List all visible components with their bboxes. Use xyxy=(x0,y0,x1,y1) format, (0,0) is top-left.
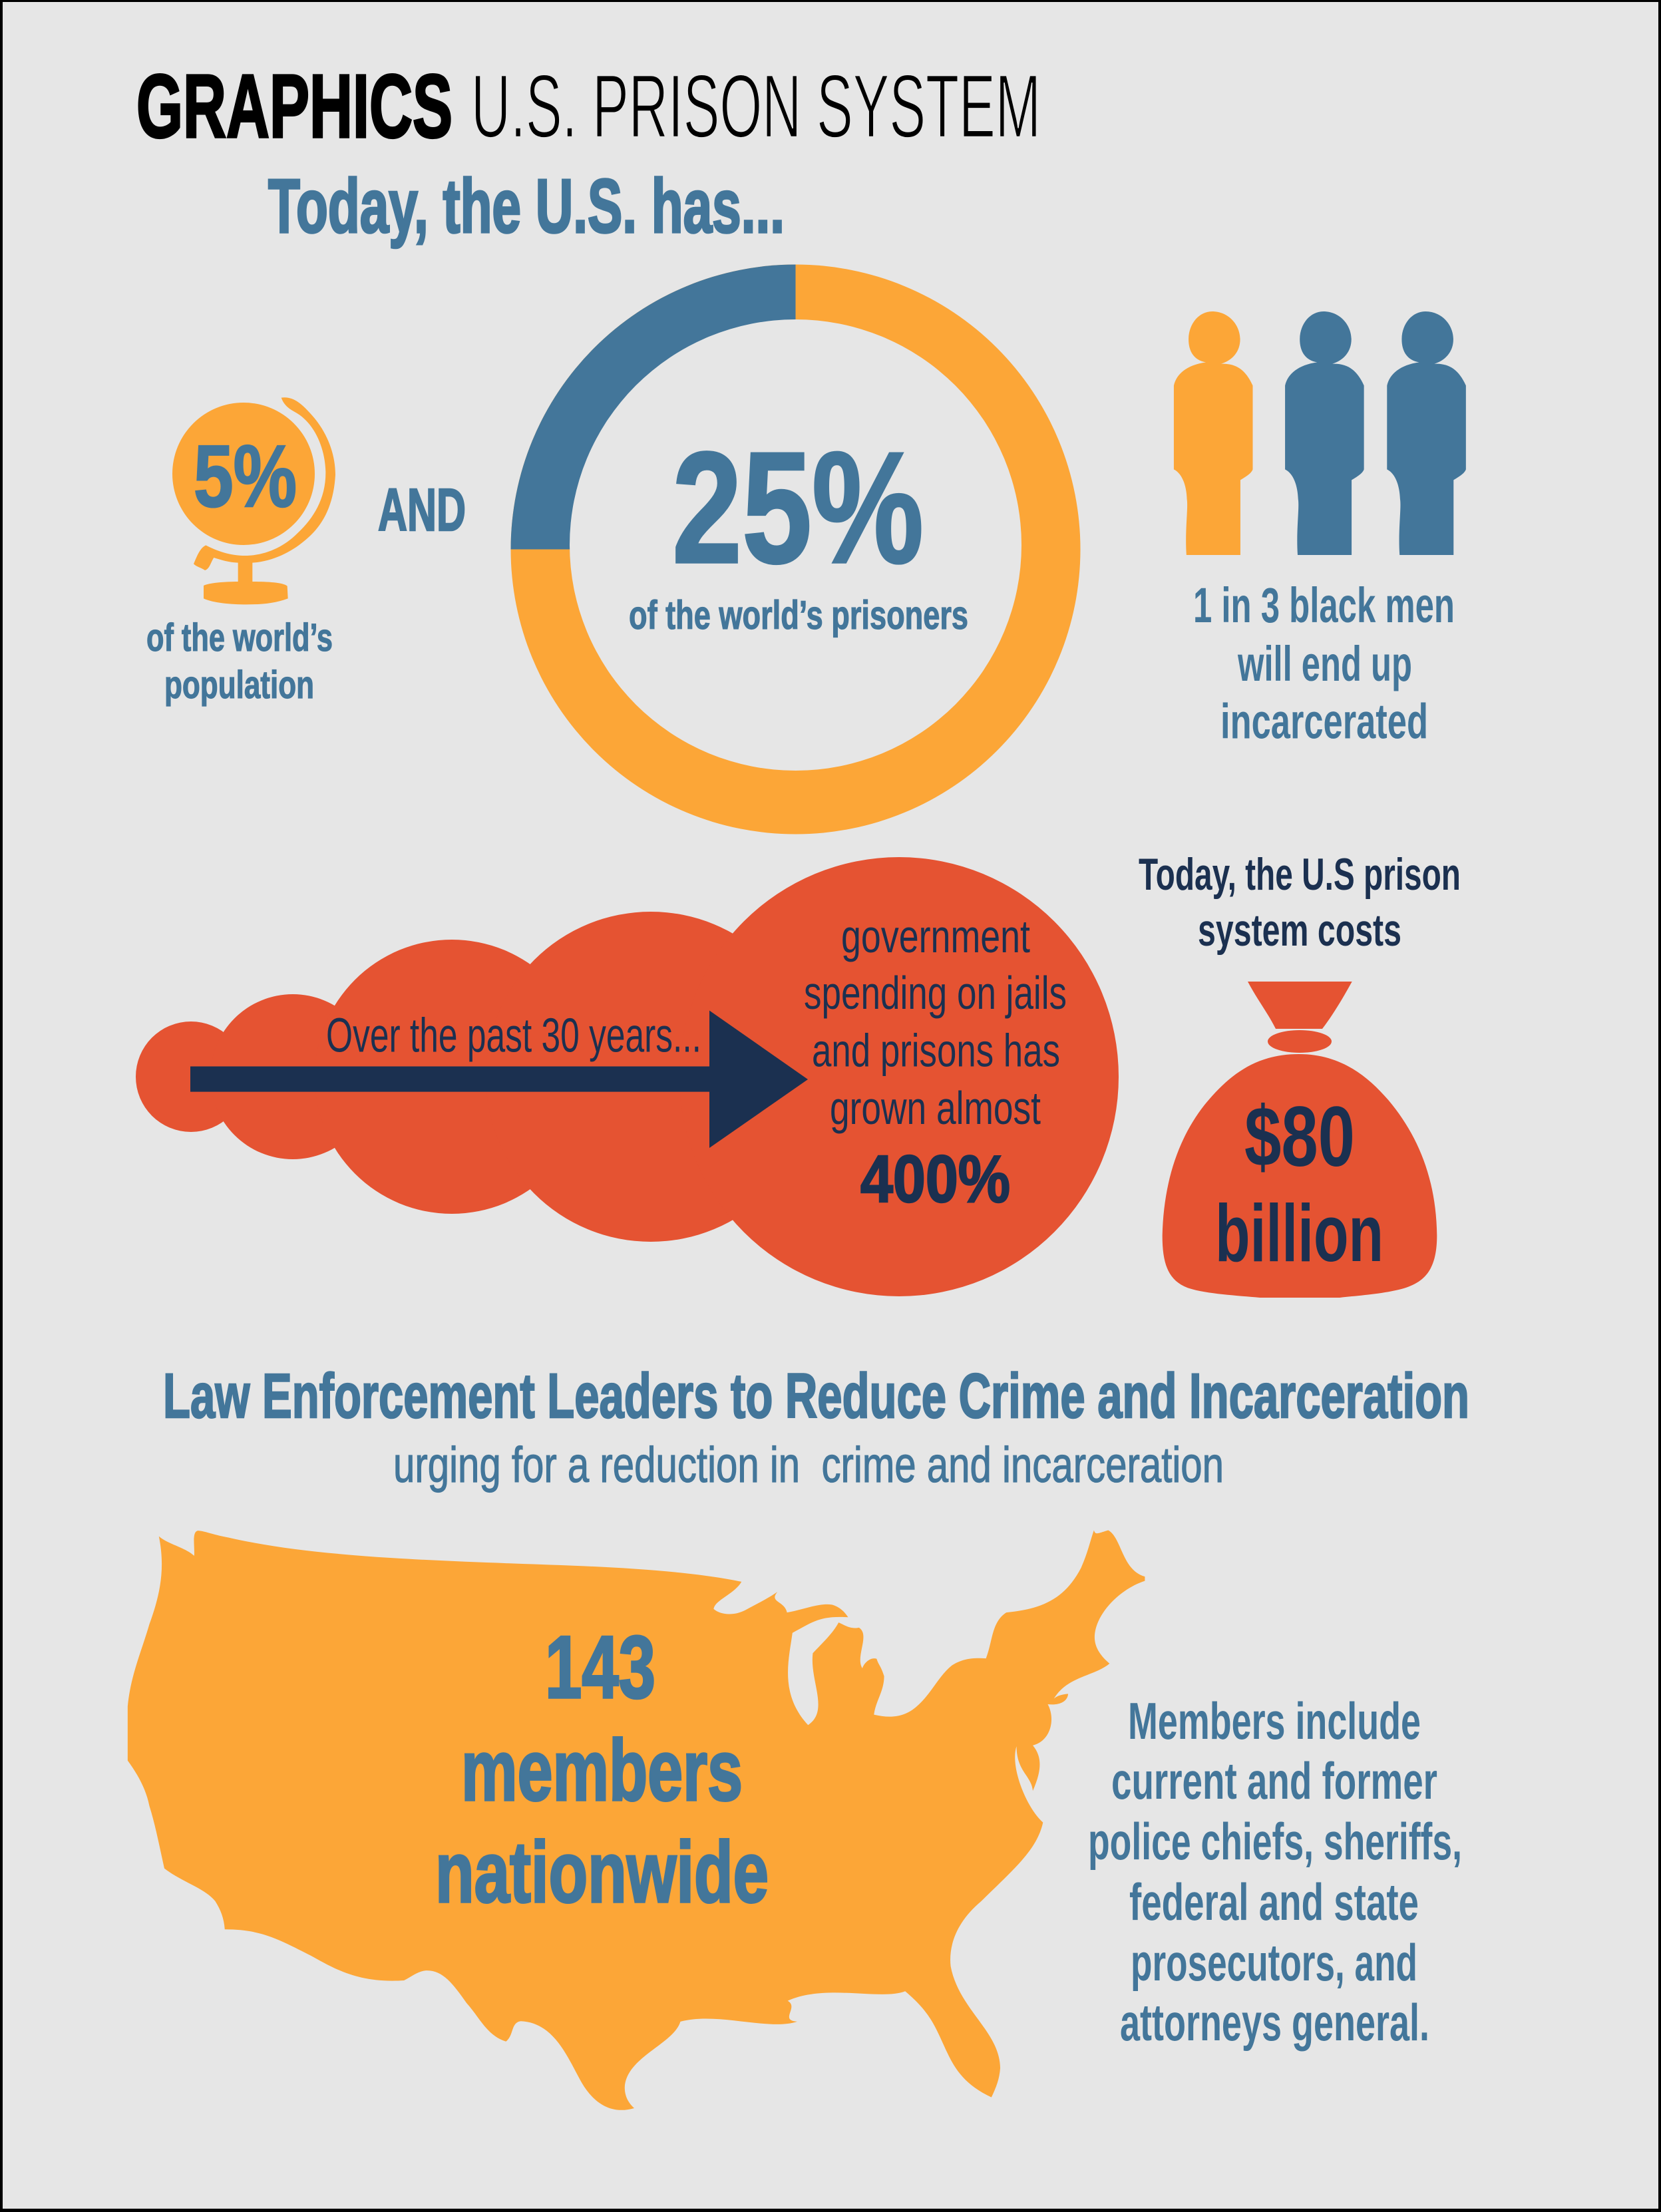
stat: 400%: 400% xyxy=(860,1142,1010,1216)
label: 1 in 3 black men will end up incarcerated: 1 in 3 black men xyxy=(1193,578,1455,633)
text: members include: Members include xyxy=(1128,1692,1421,1750)
label: 1 in 3 black men will end up incarcerated: incarcerated xyxy=(1220,693,1428,749)
stat: 143 members nationwide: nationwide xyxy=(435,1823,769,1921)
panel: prison system cost xyxy=(1139,849,1461,1298)
title xyxy=(136,56,1041,156)
label: 1 in 3 black men will end up incarcerated: will end up xyxy=(1237,636,1412,691)
label: of the world's prisoners: of the world’s prisoners xyxy=(629,593,968,638)
text: members include: federal and state xyxy=(1129,1873,1419,1931)
text: government spending: government xyxy=(841,910,1030,962)
subheading: urging for a reduction in crime and incarceration xyxy=(393,1437,1224,1493)
panel: government spending growth xyxy=(136,857,1119,1296)
label: today the U.S prison system costs: system costs xyxy=(1198,905,1401,956)
map: United States silhouette xyxy=(128,1531,1145,2110)
text: government spending: spending on jails xyxy=(804,967,1067,1019)
label: over the past 30 years: Over the past 30 years... xyxy=(326,1009,701,1062)
stat: $80 billion xyxy=(1215,1089,1384,1278)
stat: 143 members nationwide: 143 xyxy=(545,1618,655,1717)
title: GRAPHICS xyxy=(136,56,453,156)
stat: 5%: 5% xyxy=(194,427,297,525)
icon: globe xyxy=(172,397,335,604)
label: of the world's population: of the world’s xyxy=(146,616,333,659)
icon: three people xyxy=(1174,311,1466,555)
panel: 5% of the world's population xyxy=(146,397,335,707)
stat: $80 billion: $80 xyxy=(1244,1089,1355,1185)
title: U.S. PRISON SYSTEM xyxy=(471,56,1041,156)
text: members include xyxy=(1088,1692,1462,2052)
growing circles xyxy=(136,857,1119,1296)
label: today the U.S prison system costs: Today, the U.S prison xyxy=(1139,849,1461,900)
label: 1 in 3 black men will end up incarcerated xyxy=(1193,578,1455,749)
icon: money bag xyxy=(1163,982,1437,1298)
panel: 1 in 3 black men xyxy=(1174,311,1466,749)
label: of the world's population: population xyxy=(164,663,314,707)
label: today the U.S prison system costs xyxy=(1139,849,1461,956)
text: members include: prosecutors, and xyxy=(1131,1933,1417,1992)
label: of the world's population xyxy=(146,616,333,707)
donut chart xyxy=(511,265,1081,834)
heading: today the U.S. has: Today, the U.S. has... xyxy=(268,164,785,249)
stat: 143 members nationwide xyxy=(435,1618,769,1921)
text: government spending xyxy=(804,910,1067,1134)
heading: law enforcement leaders xyxy=(163,1361,1469,1493)
stat: 143 members nationwide: members xyxy=(461,1722,743,1819)
text: members include: current and former xyxy=(1111,1751,1437,1810)
arrow xyxy=(190,1010,808,1148)
text: members include: attorneys general. xyxy=(1120,1993,1429,2052)
text: government spending: and prisons has xyxy=(812,1025,1060,1077)
panel: members map xyxy=(128,1531,1145,2110)
text: government spending: grown almost xyxy=(830,1082,1041,1134)
text: members include: police chiefs, sheriffs, xyxy=(1088,1812,1462,1871)
connector word: AND: AND xyxy=(378,477,466,544)
panel: 25% of the world's prisoners xyxy=(511,265,1081,834)
stat: $80 billion: billion xyxy=(1215,1188,1384,1278)
stat: 25%: 25% xyxy=(672,420,924,596)
